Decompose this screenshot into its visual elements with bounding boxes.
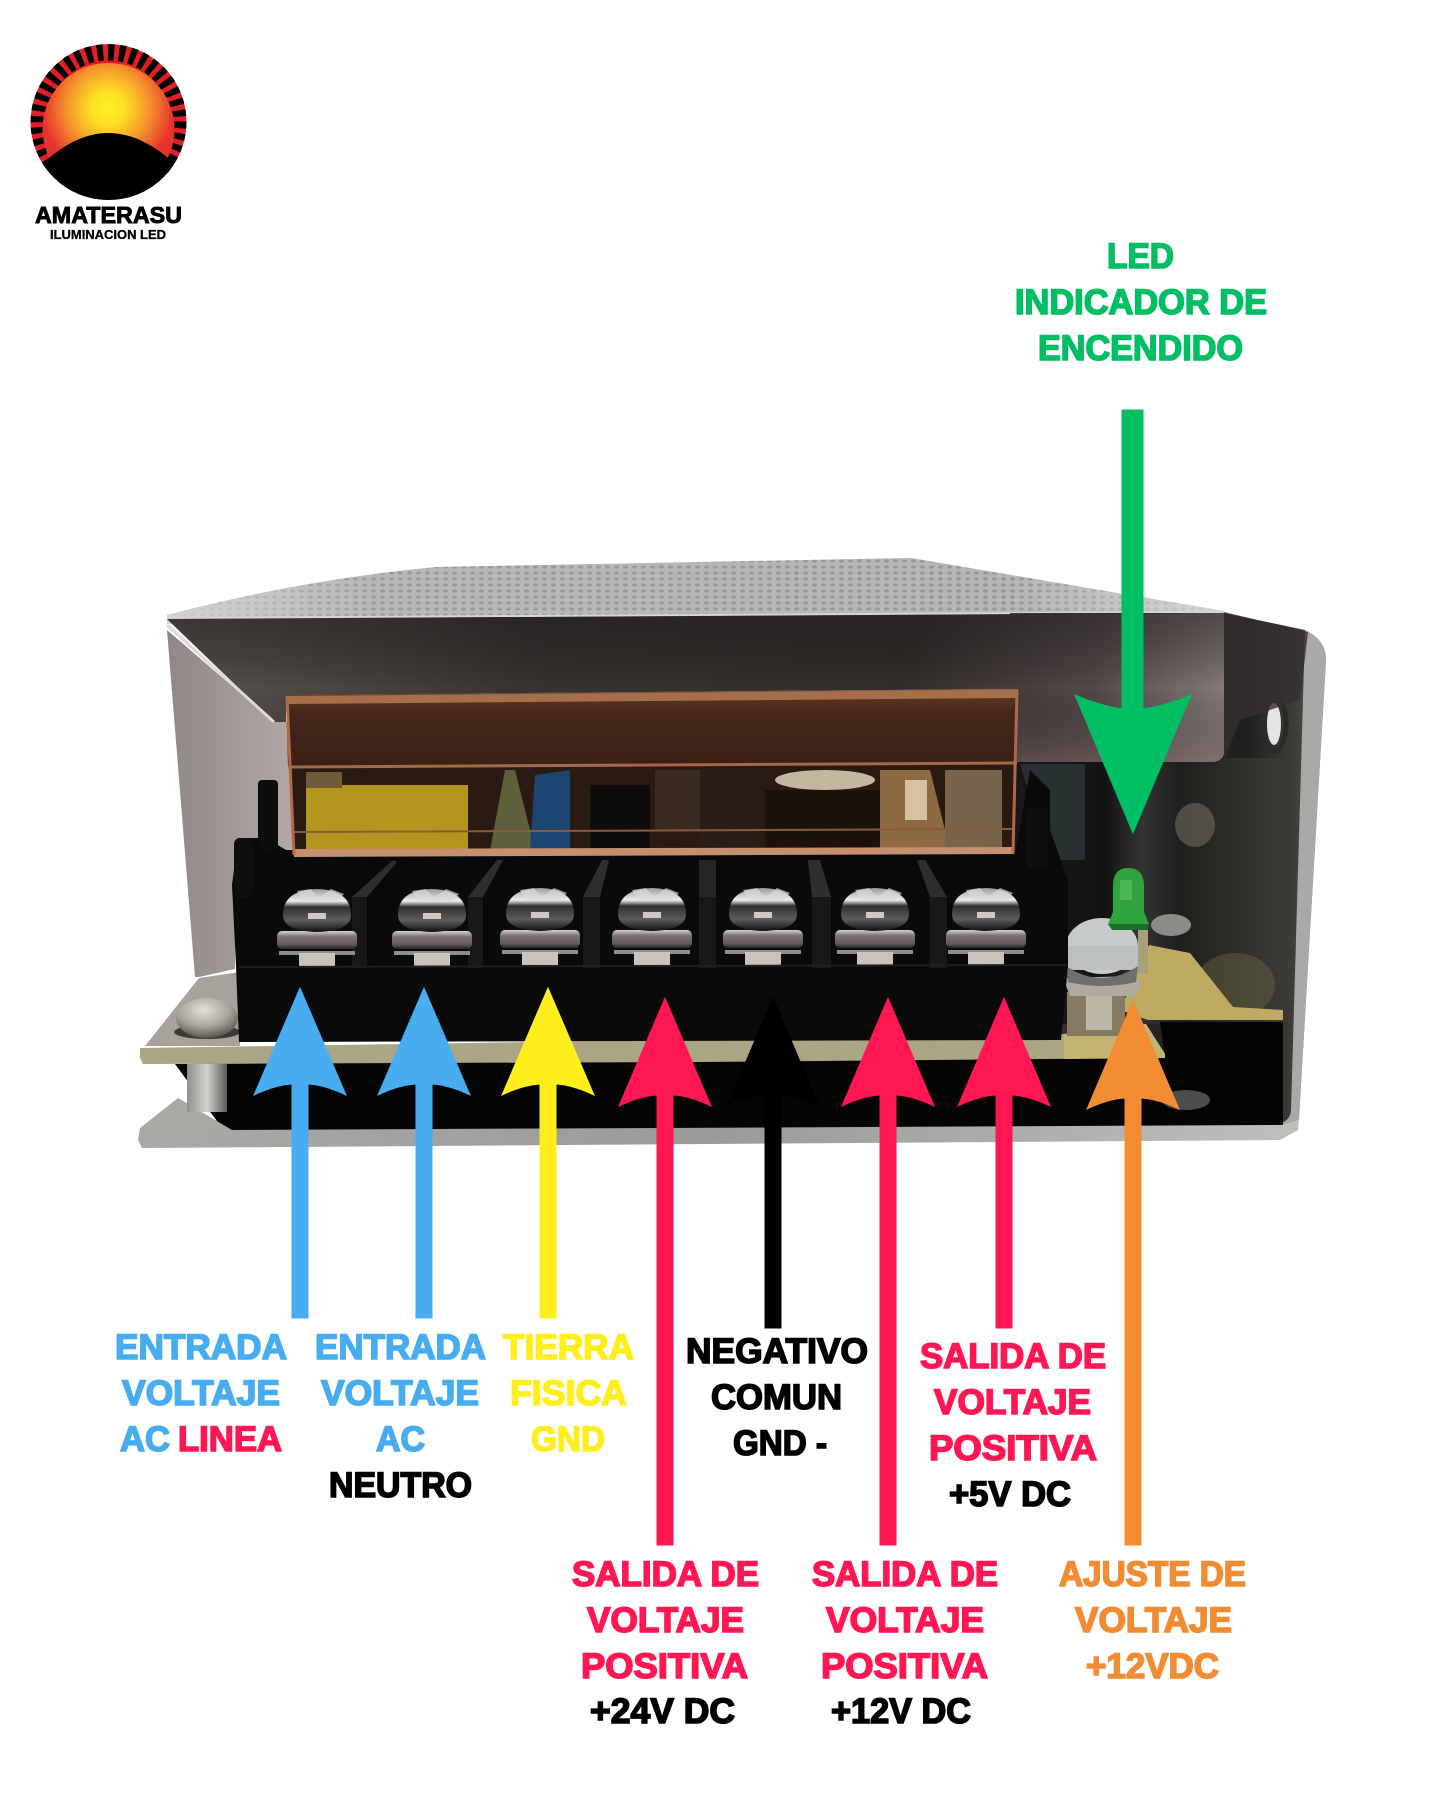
label: positive 5V: SALIDA DE [920, 1337, 1106, 1376]
label: earth ground: GND [531, 1420, 605, 1459]
label: positive 24V: SALIDA DE [572, 1555, 759, 1594]
label: earth ground: TIERRA [503, 1328, 634, 1367]
label: AC neutral input: VOLTAJE [321, 1374, 479, 1413]
lower right standoff screw [1162, 1090, 1210, 1110]
label: AC neutral input [315, 1328, 486, 1505]
label: positive 5V [920, 1337, 1106, 1514]
label: AC neutral input: AC [376, 1420, 425, 1459]
label: positive 5V: +5V DC [949, 1475, 1071, 1514]
arrow: orange voltage adjust [1087, 1001, 1179, 1545]
left mounting plate [145, 972, 240, 1046]
arrow: blue AC line [254, 988, 346, 1318]
label: earth ground [503, 1328, 634, 1459]
terminal dividers [352, 860, 947, 968]
label: voltage adjust [1059, 1555, 1246, 1686]
label: positive 24V: VOLTAJE [587, 1601, 744, 1640]
label: positive 24V: +24V DC [590, 1692, 735, 1731]
label: AC line input: ENTRADA [115, 1328, 287, 1367]
label: LED indicator [1015, 237, 1267, 368]
terminal screws [277, 888, 1026, 966]
label: LED indicator: ENCENDIDO [1038, 329, 1243, 368]
label: voltage adjust: +12VDC [1086, 1647, 1219, 1686]
reflections inside cover [306, 770, 1002, 850]
label: AC line input: LINEA [178, 1420, 282, 1459]
left side wall [167, 630, 300, 977]
arrow: red 12V [842, 998, 934, 1545]
label: common negative [686, 1332, 868, 1463]
terminal block [232, 770, 1068, 1042]
label: LED indicator: LED [1107, 237, 1174, 276]
metal lid front face [167, 613, 1224, 762]
label: LED indicator: INDICADOR DE [1015, 283, 1267, 322]
left mounting screw [174, 998, 240, 1039]
chassis floor [138, 1098, 1299, 1148]
label: positive 12V: +12V DC [831, 1692, 971, 1731]
label: positive 12V: SALIDA DE [812, 1555, 998, 1594]
amber terminal cover [286, 689, 1018, 857]
power supply photo [138, 558, 1326, 1148]
label: positive 12V: POSITIVA [821, 1647, 988, 1686]
perforated top cover [167, 558, 1224, 624]
label: common negative: COMUN [711, 1378, 842, 1417]
icon: sun emblem [30, 44, 186, 205]
label: positive 12V: VOLTAJE [826, 1601, 984, 1640]
label: earth ground: FISICA [510, 1374, 627, 1413]
arrow: green LED indicator [1075, 410, 1191, 833]
label: AC neutral input: NEUTRO [329, 1466, 472, 1505]
brand name: AMATERASU [35, 202, 182, 228]
right printed circuit board [1120, 945, 1283, 1020]
trimmer potentiometer [1063, 918, 1141, 1036]
arrow: yellow earth [502, 988, 594, 1318]
label: positive 24V [572, 1555, 759, 1731]
arrow: red 24V [619, 998, 711, 1545]
label: voltage adjust: AJUSTE DE [1059, 1555, 1246, 1594]
label: common negative: NEGATIVO [686, 1332, 868, 1371]
arrow: red 5V [958, 998, 1050, 1328]
lower black cavity [175, 1022, 1283, 1132]
brand tagline: ILUMINACION LED [50, 228, 166, 242]
arrow: blue AC neutral [378, 988, 470, 1318]
label: common negative: GND - [733, 1424, 827, 1463]
green LED [1108, 868, 1149, 974]
label: positive 24V: POSITIVA [581, 1647, 748, 1686]
label: positive 12V [812, 1555, 998, 1731]
label: positive 5V: VOLTAJE [934, 1383, 1091, 1422]
label: AC line input: AC [120, 1420, 170, 1459]
label: positive 5V: POSITIVA [929, 1429, 1097, 1468]
main circuit board edge [140, 1024, 1165, 1064]
label: AC line input [115, 1328, 287, 1459]
arrow: black common [727, 998, 819, 1328]
label: voltage adjust: VOLTAJE [1075, 1601, 1232, 1640]
label: AC line input: VOLTAJE [122, 1374, 280, 1413]
right side panel [1010, 612, 1326, 1133]
label: AC neutral input: ENTRADA [315, 1328, 486, 1367]
internal cavity [1010, 758, 1283, 1024]
standoff pillar [187, 1064, 227, 1112]
logo [30, 44, 186, 242]
